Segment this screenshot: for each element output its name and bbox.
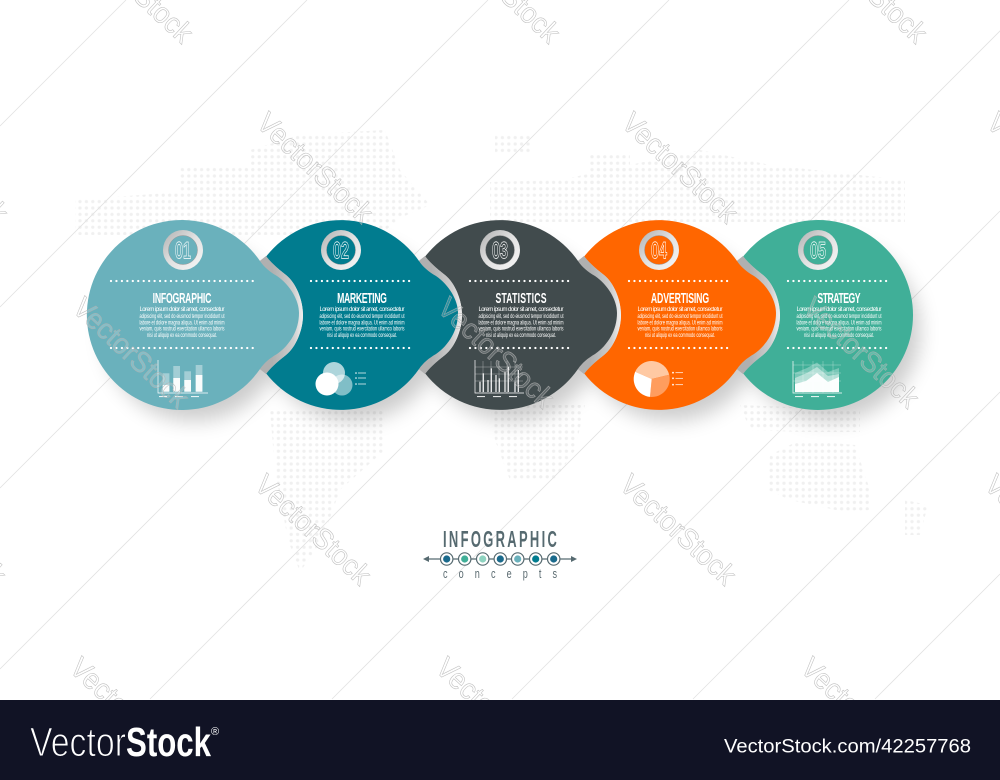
watermarks: VectorStock [613,469,742,592]
number badge: 01 [175,238,191,265]
panel shape [87,220,299,410]
body text: nisi ut aliquip ex ea commodo consequat. [147,333,217,339]
heading: STRATEGY [817,290,861,307]
number badge [321,230,361,270]
divider dots top [629,280,732,282]
body text: adipiscing elit, sed do eiusmod tempor incididunt ut [638,314,723,320]
body text [796,307,882,339]
logo dot centres [443,555,557,563]
body text: veniam, quis nostrud exercitation ullamco laboris [140,326,224,332]
watermarks: VectorStock [66,292,195,415]
panel: infographic 01 [87,220,299,410]
number badge [163,230,203,270]
body text: adipiscing elit, sed do eiusmod tempor incididunt ut [796,314,882,320]
heading: MARKETING [337,290,387,307]
bottom logo: infographic concepts [423,527,577,581]
panel shape [425,220,617,410]
watermarks: VectorStock [615,107,744,230]
divider dots top [311,280,414,282]
divider dots bottom [470,347,573,349]
body text: labore et dolore magna aliqua. Ut enim ad minim [320,320,404,326]
number badge [639,230,679,270]
divider dots top [788,280,891,282]
venn diagram [316,362,366,396]
body text: labore et dolore magna aliqua. Ut enim ad minim [478,320,564,326]
body text: Lorem ipsum dolor sit amet, consectetur [320,307,404,313]
body text: adipiscing elit, sed do eiusmod tempor incididunt ut [478,314,564,320]
body text: Lorem ipsum dolor sit amet, consectetur [796,307,882,313]
panel: strategy 05 [743,220,913,410]
footer logo: ® [211,726,219,738]
body text: labore et dolore magna aliqua. Ut enim ad minim [638,320,722,326]
heading: STATISTICS [495,290,547,307]
body text: Lorem ipsum dolor sit amet, consectetur [638,307,722,313]
footer logo [30,719,219,765]
footer url: VectorStock.com/42257768 [724,736,971,758]
bar chart [158,360,208,397]
footer bar [0,700,1000,780]
body text: nisi ut aliquip ex ea commodo consequat. [645,333,715,339]
body text: adipiscing elit, sed do eiusmod tempor incididunt ut [320,314,405,320]
body text: veniam, quis nostrud exercitation ullamco laboris [478,326,564,332]
logo arrow line [423,556,577,562]
divider dots bottom [311,347,414,349]
silver ring 03 [560,256,621,374]
heading: INFOGRAPHIC [153,290,212,307]
logo subtitle: concepts [443,568,557,581]
heading: ADVERTISING [651,290,709,307]
number badge: 03 [492,238,508,265]
body text [638,307,723,339]
body text: nisi ut aliquip ex ea commodo consequat. [804,333,874,339]
silver ring 01 [242,256,303,374]
panel: statistics 03 [425,220,617,410]
dotted world map [75,130,928,572]
bar chart thin [475,360,524,397]
divider dots bottom [788,347,891,349]
body text [320,307,405,339]
area chart [793,361,842,397]
watermarks: VectorStock [248,469,377,592]
panel: advertising 04 [584,220,776,410]
card shadows [104,241,920,421]
body text: labore et dolore magna aliqua. Ut enim ad minim [140,320,224,326]
body text: nisi ut aliquip ex ea commodo consequat. [486,333,556,339]
footer logo: Vector [30,719,126,765]
footer logo: Stock [126,719,211,765]
panel shape [266,220,458,410]
divider dots top [470,280,573,282]
divider dots bottom [629,347,732,349]
divider dots bottom [111,347,254,349]
body text: veniam, quis nostrud exercitation ullamco laboris [320,326,404,332]
silver ring 02 [401,256,462,374]
body text: labore et dolore magna aliqua. Ut enim ad minim [796,320,882,326]
panel: marketing 02 [266,220,458,410]
silver ring 04 [719,256,780,374]
body text: Lorem ipsum dolor sit amet, consectetur [140,307,224,313]
watermarks: VectorStock [796,292,925,415]
body text: veniam, quis nostrud exercitation ullamco laboris [796,326,882,332]
body text [478,307,564,339]
watermarks: VectorStock [250,107,379,230]
divider dots top [111,280,254,282]
body text: Lorem ipsum dolor sit amet, consectetur [478,307,564,313]
logo dots [440,553,560,565]
watermarks: VectorStock [429,652,558,775]
body text: nisi ut aliquip ex ea commodo consequat. [327,333,397,339]
watermarks: VectorStock [794,652,923,775]
body text: veniam, quis nostrud exercitation ullamco laboris [638,326,722,332]
body text: adipiscing elit, sed do eiusmod tempor incididunt ut [140,314,225,320]
panel shape [584,220,776,410]
logo title: INFOGRAPHIC [443,527,557,553]
number badge: 02 [333,238,349,265]
pie chart [634,361,683,397]
number badge [798,230,838,270]
panel shape [743,220,913,410]
body text [140,307,225,339]
number badge [480,230,520,270]
watermarks: VectorStock [63,652,192,775]
number badge: 04 [651,238,667,265]
watermarks: VectorStock [431,292,560,415]
number badge: 05 [810,238,826,265]
